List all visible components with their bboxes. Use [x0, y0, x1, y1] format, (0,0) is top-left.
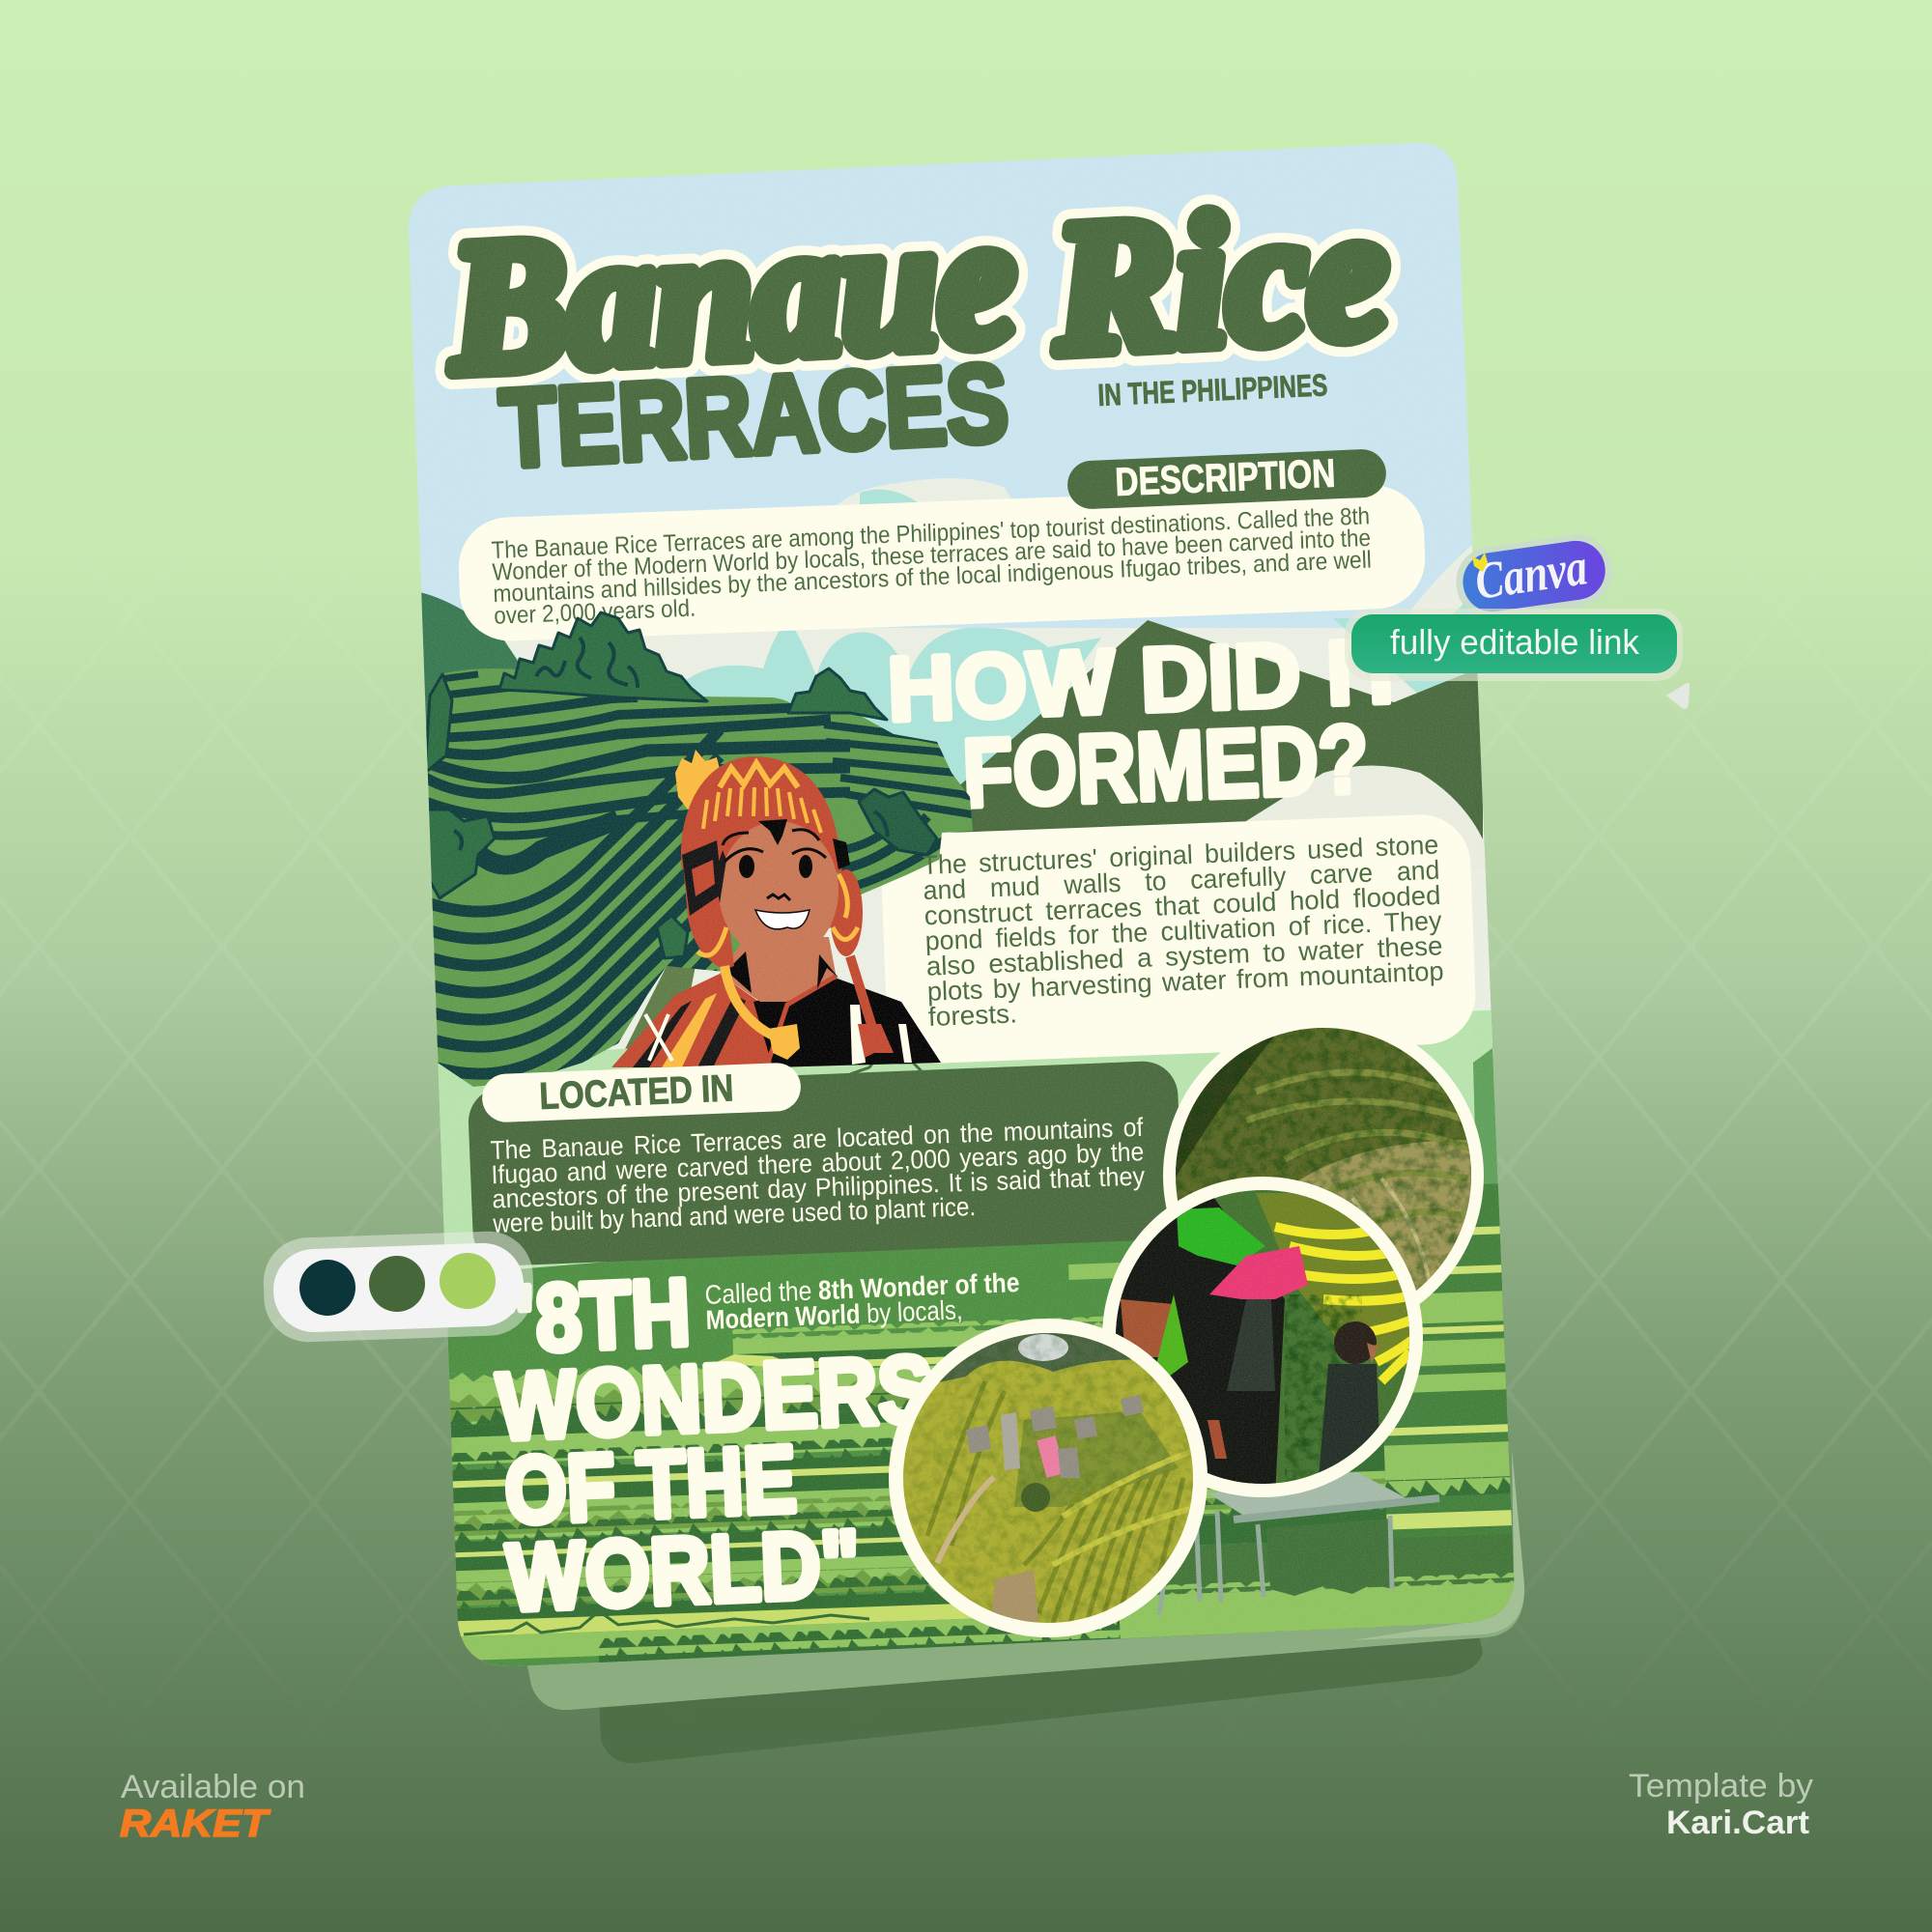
trees on terraces [425, 612, 937, 958]
smile [755, 910, 810, 929]
subtitle: in the Philippines: IN THE PHILIPPINES [1097, 367, 1328, 412]
8th wonders heading: WONDERS [495, 1335, 935, 1460]
formation text: and mud walls to carefully carve and [923, 855, 1440, 905]
formation text: construct terraces that could hold flooded [923, 880, 1441, 930]
description text: The Banaue Rice Terraces are among the Philippines' top tourist destinations. Called the 8th [491, 502, 1371, 564]
8th wonders heading: OF THE [502, 1425, 799, 1544]
glass back panel [526, 1584, 1524, 1710]
title: Banaue Rice: Banaue [443, 175, 1020, 412]
located in text: ancestors of the present day Philippines. It is said that they [492, 1161, 1146, 1214]
glass edge of card [1352, 1449, 1524, 1640]
footer: template by Kari.Cart [1629, 1768, 1813, 1841]
editable link button [1345, 609, 1683, 681]
footer: template by Kari.Cart: Kari.Cart [1666, 1804, 1809, 1841]
right dark hill [1473, 1048, 1501, 1246]
hut shelter [1159, 1472, 1439, 1614]
poster card [409, 143, 1515, 1667]
swatch forest green [369, 1256, 425, 1312]
grey cloud on right [1246, 765, 1488, 869]
red braid [850, 956, 874, 1034]
located in body box [468, 1060, 1183, 1267]
rice field [447, 1183, 1515, 1667]
description text: over 2,000 years old. [494, 595, 696, 630]
dress [753, 979, 941, 1067]
8th wonder caption: Modern World by locals, [705, 1294, 963, 1335]
face [719, 821, 838, 960]
formation text box [880, 812, 1477, 1065]
hat [681, 756, 842, 874]
right edge rows [1383, 1183, 1513, 1549]
cursor arrow [1666, 683, 1690, 709]
formation text: pond fields for the cultivation of rice. They [924, 905, 1442, 956]
crown [1472, 553, 1488, 572]
title: Banaue Rice: Rice [1048, 167, 1393, 393]
Canva badge: Canva [1471, 537, 1591, 611]
footer: available on Raket [120, 1769, 305, 1845]
colour palette pill [262, 1230, 535, 1344]
swatch lime green [440, 1253, 496, 1309]
formation text: The structures' original builders used stone [922, 830, 1439, 880]
paper grain overlay [386, 126, 1546, 1690]
heading: how did it formed [886, 619, 1410, 828]
footer: available on Raket: Available on [121, 1769, 305, 1805]
description box [457, 484, 1427, 642]
title: Banaue Rice: Rice [1048, 167, 1393, 393]
8th wonders heading [495, 1259, 935, 1631]
woman illustration [611, 750, 941, 1067]
heading: how did it formed: HOW DID IT [886, 619, 1410, 740]
located in text: Ifugao and were carved there about 2,000 years ago by the [491, 1137, 1145, 1189]
swatch dark teal [299, 1260, 355, 1316]
located in text: The Banaue Rice Terraces are located on the mountains of [490, 1113, 1144, 1165]
skin chest [720, 937, 837, 1002]
yellow cord [724, 966, 787, 1041]
card drop shadow [599, 1633, 1483, 1763]
description text: Wonder of the Modern World by locals, these terraces are said to have been carved into the [492, 525, 1371, 586]
located in text: were built by hand and were used to plant rice. [492, 1192, 977, 1238]
photo circle: aerial village [889, 1319, 1208, 1637]
formation text: plots by harvesting water from mountaintop [926, 955, 1444, 1007]
cream clouds behind description [425, 478, 1507, 1063]
formation text [922, 830, 1445, 1032]
heading: how did it formed: FORMED? [961, 705, 1371, 828]
8th wonder caption [704, 1267, 1021, 1335]
sky gaps and teal clouds [686, 489, 1478, 784]
pompom [675, 750, 726, 810]
olive slope behind woman [625, 966, 696, 1049]
terraces illustration [415, 668, 976, 1155]
8th wonder caption: Called the 8th Wonder of the [704, 1267, 1020, 1310]
description pill: DESCRIPTION [1114, 450, 1336, 504]
background lattice pattern [0, 1259, 1932, 1389]
field squiggle line [464, 1611, 869, 1634]
left ear flap [682, 845, 734, 970]
dark mountain [951, 620, 1483, 839]
8th wonders heading: "8TH [495, 1259, 693, 1373]
formation text: also established a system to water these [925, 930, 1443, 981]
lower right grass [1157, 1534, 1515, 1595]
located in pill [481, 1062, 802, 1123]
sky [386, 126, 1546, 1690]
hair [758, 819, 787, 845]
photo circle: terraced hillside [1163, 1015, 1484, 1336]
photo circle: women in terraces [1102, 1177, 1423, 1497]
description text: mountains and hillsides by the ancestors of the local indigenous Ifugao tribes, and are well [493, 546, 1372, 608]
right ear flap [830, 869, 863, 956]
located in text [489, 1113, 1147, 1238]
yellow bank [712, 1354, 802, 1368]
title: Banaue Rice: Banaue [443, 175, 1020, 412]
shawl [611, 974, 778, 1067]
light green land [425, 1009, 1507, 1352]
located in pill: LOCATED IN [539, 1067, 734, 1118]
distant peak outline [850, 1063, 923, 1073]
footer: available on Raket: RAKET [120, 1803, 271, 1845]
left dark hill [421, 592, 518, 730]
eyes and brows [739, 855, 754, 878]
title: Banaue Rice [443, 167, 1393, 412]
title: TERRACES: TERRACES [497, 342, 1011, 491]
8th wonders heading: WORLD" [504, 1510, 863, 1631]
field bands [449, 1183, 1515, 1662]
footer: template by Kari.Cart: Template by [1629, 1768, 1813, 1804]
description text [491, 502, 1373, 630]
formation text: forests. [927, 998, 1017, 1032]
editable link button: fully editable link [1390, 622, 1640, 662]
